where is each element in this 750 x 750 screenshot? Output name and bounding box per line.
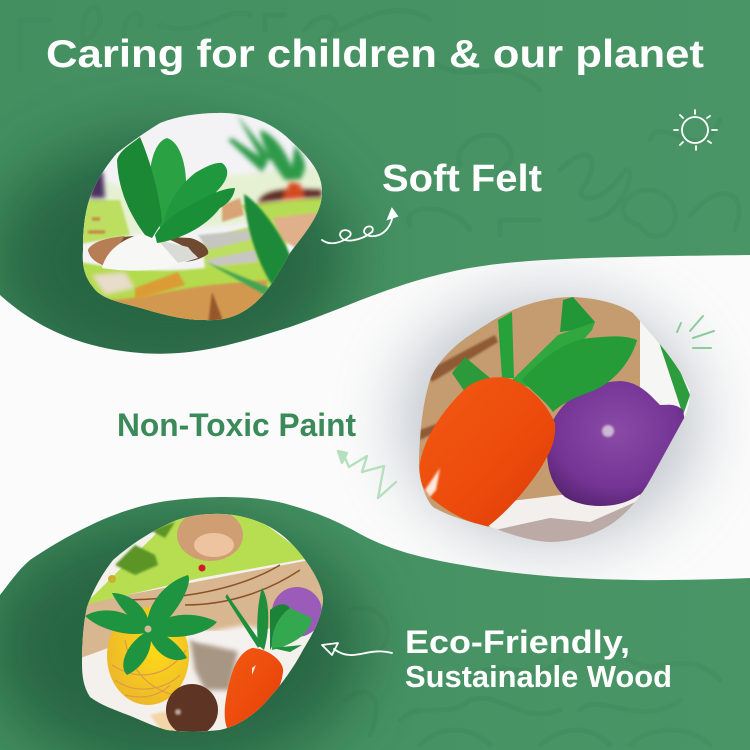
arrow: curly to soft felt: [322, 209, 397, 243]
arrow: to pineapple photo: [322, 643, 392, 655]
purple eggplant: [547, 381, 685, 506]
title: Caring for children & our planet: [46, 33, 704, 76]
accent: sparkle rays: [677, 316, 714, 348]
pineapple: [107, 607, 189, 705]
icon: sun: [674, 110, 717, 150]
front blurred felt leaf: [244, 194, 291, 285]
shadow: middle blob on white: [400, 295, 700, 545]
photo: soft felt turnip: [82, 112, 322, 320]
photo: pineapple and carrot: [82, 514, 323, 732]
label: eco-friendly sustainable wood: [405, 624, 672, 694]
label: eco-friendly sustainable wood: Eco-Friendly,: [405, 624, 630, 660]
photo: carrot and eggplant: [419, 297, 690, 542]
orange carrot: [419, 377, 555, 527]
purple ball behind: [272, 587, 322, 637]
brown nut: [166, 684, 218, 736]
pineapple star leaves: [85, 575, 217, 675]
label: soft felt: Soft Felt: [382, 158, 542, 200]
white wave band: [0, 255, 750, 595]
back felt plant: [228, 115, 322, 203]
felt stems and leaves: [452, 297, 637, 412]
shadow: top blob on green: [0, 135, 350, 385]
shadow: bottom blob on green: [0, 515, 365, 750]
arrow: zigzag: [338, 451, 396, 498]
carrot felt leaves: [226, 595, 262, 647]
felt leaves: [117, 137, 235, 243]
label: eco-friendly sustainable wood: Sustainable Wood: [405, 659, 672, 694]
carrot small: [225, 648, 283, 728]
label: non-toxic paint: Non-Toxic Paint: [117, 407, 356, 443]
